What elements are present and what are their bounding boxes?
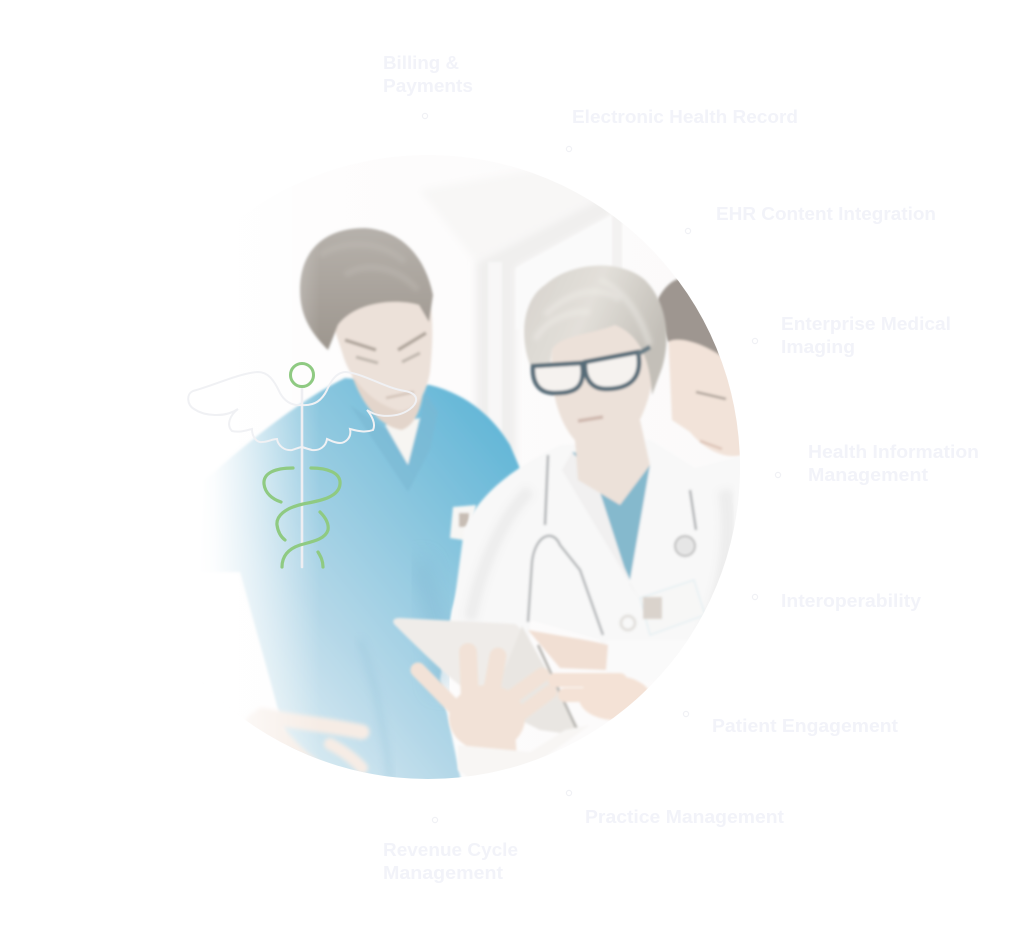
label: Interoperability: Interoperability xyxy=(781,590,922,611)
label: EHR Content Integration: EHR Content Integration xyxy=(716,203,936,224)
label: Practice Management: Practice Management xyxy=(585,806,784,827)
label: Billing & Payments xyxy=(383,52,473,96)
caduceus icon xyxy=(188,364,416,567)
face xyxy=(550,324,652,440)
hand on hip xyxy=(262,715,362,790)
label: Enterprise Medical Imaging: Enterprise Medical xyxy=(781,313,951,334)
label: Electronic Health Record: Electronic Health Record xyxy=(572,106,798,127)
label: Enterprise Medical Imaging: Imaging xyxy=(781,336,855,357)
label: Health Information Management: Management xyxy=(808,464,928,485)
id badge xyxy=(450,505,476,541)
label: Revenue Cycle Management: Management xyxy=(383,862,503,883)
nurse in blue scrubs xyxy=(200,228,524,790)
tablet xyxy=(392,616,520,686)
glasses xyxy=(533,363,583,393)
collar xyxy=(414,426,420,444)
connector dots xyxy=(422,113,781,823)
hair xyxy=(300,228,433,350)
left fade overlay xyxy=(199,258,312,743)
hospital corridor background xyxy=(430,174,622,458)
third doctor xyxy=(655,278,745,456)
label: Revenue Cycle Management: Revenue Cycle xyxy=(383,839,518,860)
senior doctor in white coat xyxy=(452,264,734,636)
infographic canvas xyxy=(188,56,978,883)
staff xyxy=(301,387,303,567)
label: Enterprise Medical Imaging xyxy=(781,313,951,357)
cuff of pointing hand xyxy=(606,640,695,682)
mouth xyxy=(578,417,603,421)
pointing hand xyxy=(555,680,620,695)
right wing xyxy=(302,372,416,450)
torso xyxy=(200,378,524,790)
label: Revenue Cycle Management xyxy=(383,839,518,883)
tablet and hands xyxy=(392,616,648,772)
label: Health Information Management: Health Information xyxy=(808,441,979,462)
tablet-holding hand xyxy=(449,685,525,751)
label: Billing & Payments: Billing & xyxy=(383,52,459,73)
label: Billing & Payments: Payments xyxy=(383,75,473,96)
hair xyxy=(524,265,667,395)
brows, eyes, mouth xyxy=(345,333,426,350)
ring xyxy=(290,364,314,386)
cuff xyxy=(456,726,580,776)
neck and face xyxy=(352,376,424,430)
left wing xyxy=(188,372,302,450)
label: Patient Engagement: Patient Engagement xyxy=(712,715,898,736)
fold shadows xyxy=(428,600,450,690)
label: Health Information Management xyxy=(808,441,979,485)
serpent xyxy=(264,468,340,567)
photo: medical team in circle xyxy=(220,174,740,779)
